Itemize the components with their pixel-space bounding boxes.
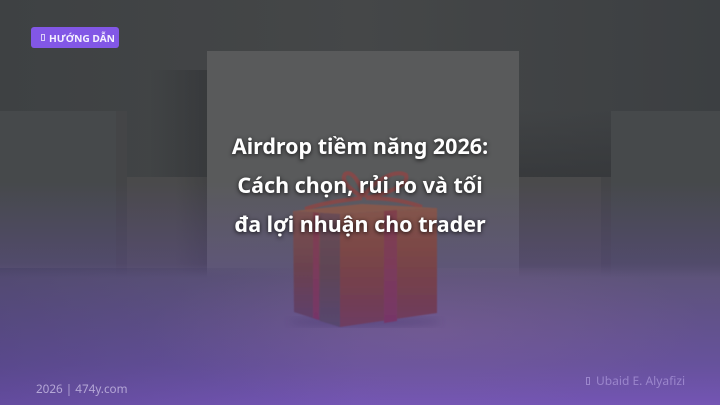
gift box xyxy=(293,173,437,327)
lid top xyxy=(293,204,437,214)
left face inner strip xyxy=(320,213,340,327)
back wall xyxy=(0,0,720,272)
category badge: HƯỚNG DẪN xyxy=(49,31,115,45)
photo credit: Ubaid E. Alyafizi xyxy=(596,372,685,389)
title: Airdrop tiềm năng 2026: xyxy=(232,132,488,161)
floor spotlight xyxy=(0,268,720,405)
right low panels xyxy=(519,111,720,278)
left low panels xyxy=(0,111,207,278)
category badge xyxy=(31,27,119,48)
centre panel xyxy=(207,51,519,278)
title xyxy=(230,132,488,240)
wall shadows beside centre panel xyxy=(150,70,611,178)
date and site: 2026 | 474y.com xyxy=(36,381,128,397)
right face xyxy=(340,208,437,327)
left face xyxy=(293,211,340,327)
ribbons xyxy=(313,212,319,320)
bow xyxy=(305,173,422,209)
floor xyxy=(0,264,720,405)
title: Cách chọn, rủi ro và tối xyxy=(237,171,483,200)
gift shadow xyxy=(289,317,441,327)
title: đa lợi nhuận cho trader xyxy=(234,210,486,239)
lower-left darkening xyxy=(0,268,720,405)
